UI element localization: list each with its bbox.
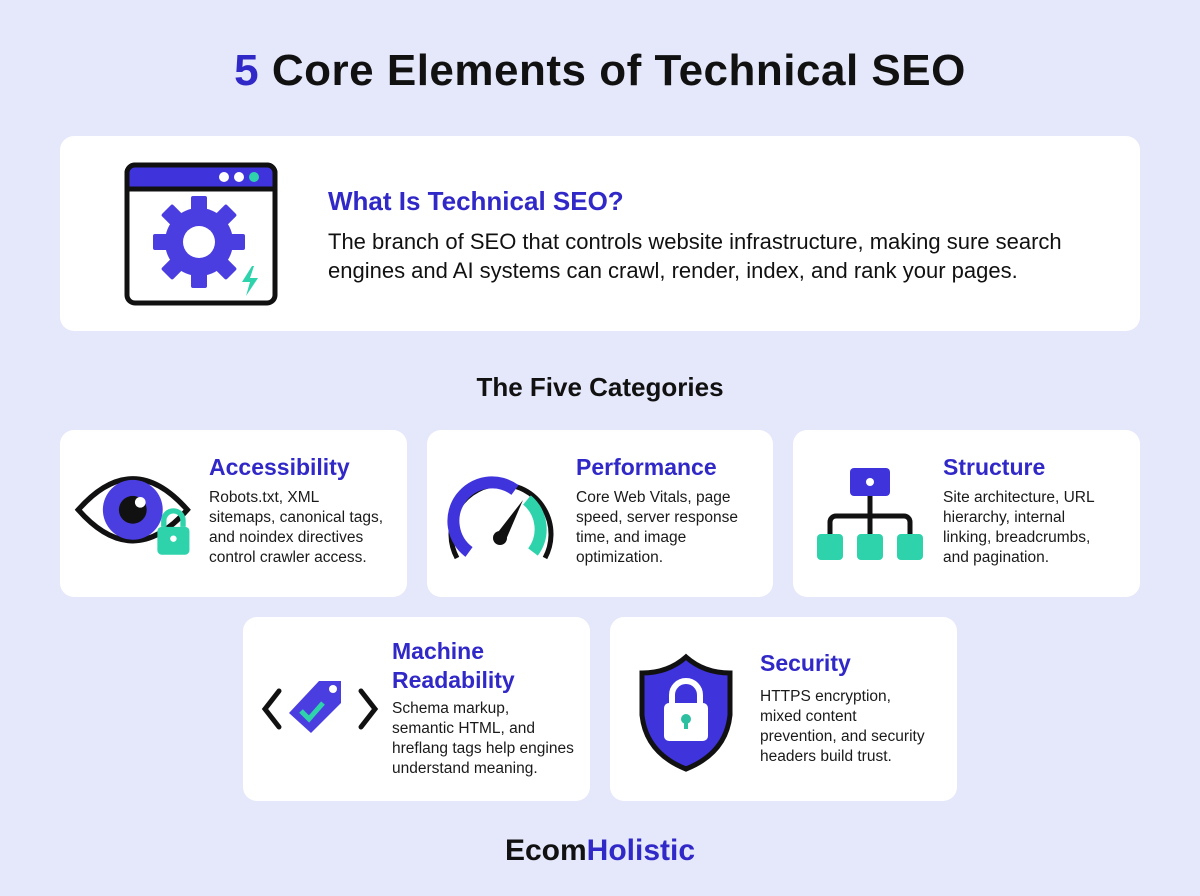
icon: eye with lock bbox=[74, 476, 191, 555]
panel: accessibility bbox=[60, 430, 407, 597]
text bbox=[392, 700, 574, 777]
icon: code tag bbox=[262, 681, 378, 733]
text: HTTPS encryption, bbox=[760, 688, 891, 705]
text: control crawler access. bbox=[209, 549, 367, 566]
icon: site tree bbox=[817, 468, 923, 560]
body text bbox=[328, 229, 1062, 283]
text: linking, breadcrumbs, bbox=[943, 529, 1090, 546]
text: optimization. bbox=[576, 549, 663, 566]
footer logo: EcomHolistic bbox=[505, 834, 695, 867]
section heading: The Five Categories bbox=[476, 372, 724, 402]
text: understand meaning. bbox=[392, 760, 538, 777]
text: prevention, and security bbox=[760, 728, 925, 745]
panel: what is technical seo bbox=[60, 136, 1140, 331]
text: sitemaps, canonical tags, bbox=[209, 509, 383, 526]
body text: engines and AI systems can crawl, render, index, and rank your pages. bbox=[328, 258, 1018, 283]
panel: machine readability bbox=[243, 617, 590, 801]
text: and pagination. bbox=[943, 549, 1049, 566]
text bbox=[760, 688, 925, 765]
title: Machine bbox=[392, 638, 484, 664]
title: 5 Core Elements of Technical SEO bbox=[234, 46, 966, 95]
text: time, and image bbox=[576, 529, 686, 546]
title: Structure bbox=[943, 454, 1045, 480]
body text: The branch of SEO that controls website infrastructure, making sure search bbox=[328, 229, 1062, 254]
text: Core Web Vitals, page bbox=[576, 489, 731, 506]
icon: browser with gear bbox=[124, 162, 278, 306]
text bbox=[209, 489, 383, 566]
title: Security bbox=[760, 650, 851, 676]
text bbox=[576, 489, 738, 566]
text: mixed content bbox=[760, 708, 856, 725]
text: Robots.txt, XML bbox=[209, 489, 319, 506]
panel: security bbox=[610, 617, 957, 801]
panel: performance bbox=[427, 430, 773, 597]
text: headers build trust. bbox=[760, 748, 892, 765]
title: Performance bbox=[576, 454, 717, 480]
text: Schema markup, bbox=[392, 700, 509, 717]
text: Site architecture, URL bbox=[943, 489, 1095, 506]
icon: shield lock bbox=[640, 654, 732, 772]
text: hierarchy, internal bbox=[943, 509, 1065, 526]
panel: structure bbox=[793, 430, 1140, 597]
text: and noindex directives bbox=[209, 529, 363, 546]
text: hreflang tags help engines bbox=[392, 740, 574, 757]
title: Accessibility bbox=[209, 454, 350, 480]
icon: speedometer bbox=[447, 476, 554, 560]
title: Readability bbox=[392, 667, 515, 693]
text: semantic HTML, and bbox=[392, 720, 535, 737]
title bbox=[392, 638, 515, 693]
text: speed, server response bbox=[576, 509, 738, 526]
heading: What Is Technical SEO? bbox=[328, 186, 624, 216]
text bbox=[943, 489, 1095, 566]
